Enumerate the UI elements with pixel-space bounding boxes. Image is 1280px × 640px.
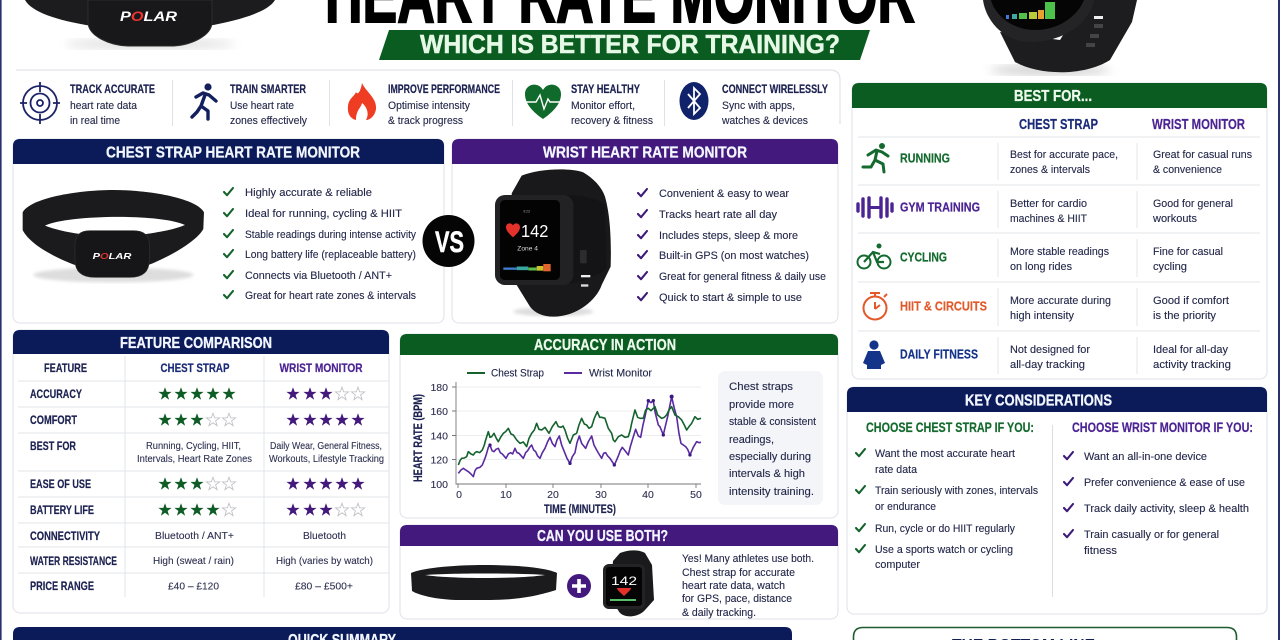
line chart: heart rate over time: 20 (547, 489, 559, 501)
text: connect wirelessly (721, 82, 828, 127)
image: wrist watch: 9:23 (523, 209, 530, 213)
callout: chest strap stability: provide more (729, 399, 794, 411)
row labels (30, 387, 117, 593)
table text cells: Intervals, Heart Rate Zones (137, 453, 252, 465)
icon: bluetooth (680, 82, 708, 120)
row labels: EASE OF USE (30, 477, 91, 491)
line chart: heart rate over time: 100 (430, 479, 448, 491)
row: running: Best for accurate pace, (1010, 149, 1118, 161)
column: choose wrist monitor (1064, 419, 1253, 557)
column: choose chest strap: Train seriously with zones, intervals (875, 485, 1038, 497)
row: daily fitness (863, 340, 1231, 371)
device image: sports watch top right (983, 0, 1137, 75)
text: track accurate: in real time (70, 115, 120, 127)
device image: polar strap top left: POLAR (120, 9, 177, 24)
text: use both: & daily tracking. (682, 607, 756, 619)
device image: polar strap top left (25, 0, 275, 49)
list: wrist benefits: Great for general fitness & daily use (659, 271, 826, 283)
row: cycling: cycling (1153, 261, 1187, 273)
table text cells: Bluetooth / ANT+ (155, 530, 234, 542)
line chart: heart rate over time: 180 (430, 382, 448, 394)
table text cells: £40 – £120 (168, 580, 219, 592)
text: track accurate: heart rate data (70, 100, 138, 112)
callout: chest strap stability: especially during (729, 451, 811, 463)
row: hiit and circuits: is the priority (1153, 310, 1216, 322)
row: hiit and circuits: high intensity (1010, 310, 1074, 322)
text: track accurate: TRACK ACCURATE (70, 82, 155, 96)
column: choose chest strap: Want the most accurate heart (875, 448, 1015, 460)
row: running: Great for casual runs (1153, 149, 1252, 161)
text: stay healthy: recovery & fitness (571, 115, 653, 127)
list: wrist benefits: Tracks heart rate all day (659, 209, 777, 221)
column headings (1019, 117, 1245, 133)
row: gym training (858, 198, 1233, 225)
line chart: heart rate over time: 30 (595, 489, 607, 501)
column: choose wrist monitor: Train casually or for general (1084, 529, 1219, 541)
row labels: PRICE RANGE (30, 579, 94, 593)
image: wrist watch (495, 169, 611, 317)
row: cycling: Fine for casual (1153, 246, 1223, 258)
chest strap star ratings (158, 387, 236, 516)
image: watch small: 142 (611, 576, 637, 588)
text: improve performance: & track progress (388, 115, 463, 127)
table text cells: Bluetooth (303, 530, 346, 542)
row: gym training: Better for cardio (1010, 198, 1087, 210)
row: cycling: More stable readings (1010, 246, 1109, 258)
chart legend: Wrist Monitor (589, 368, 652, 380)
column: choose chest strap: computer (875, 559, 920, 571)
text: improve performance: IMPROVE PERFORMANCE (388, 82, 500, 96)
text: use both: heart rate data, watch (682, 580, 785, 592)
text: train smarter (230, 82, 307, 127)
icon: flame (348, 83, 376, 120)
panel: wrist monitor (452, 139, 838, 323)
panel: key considerations (847, 387, 1267, 614)
list: wrist benefits: Convenient & easy to wear (659, 188, 789, 200)
list: wrist benefits (638, 188, 826, 304)
VS badge (422, 215, 474, 267)
text: connect wirelessly: CONNECT WIRELESSLY (722, 82, 828, 96)
row: daily fitness: Ideal for all-day (1153, 344, 1228, 356)
row: cycling: on long rides (1010, 261, 1072, 273)
table text cells: Running, Cycling, HIIT, (146, 440, 241, 452)
table text cells: Daily Wear, General Fitness, (270, 440, 382, 452)
table header row: CHEST STRAP (160, 361, 230, 375)
column: choose wrist monitor: fitness (1084, 545, 1118, 557)
list: wrist benefits: Quick to start & simple to use (659, 292, 802, 304)
text: stay healthy: STAY HEALTHY (571, 82, 640, 96)
row: gym training: machines & HIIT (1010, 213, 1087, 225)
heading: best for (852, 83, 1267, 108)
list: wrist benefits: Built-in GPS (on most watches) (659, 250, 809, 262)
row: daily fitness: activity tracking (1153, 359, 1231, 371)
column: choose chest strap: rate data (875, 464, 918, 476)
panel: accuracy in action (400, 334, 838, 518)
row: cycling: CYCLING (900, 250, 947, 264)
row: hiit and circuits: More accurate during (1010, 295, 1111, 307)
icon: runner (192, 83, 216, 119)
text: train smarter: Use heart rate (230, 100, 294, 112)
row: running: RUNNING (900, 152, 950, 166)
row: hiit and circuits: HIIT & CIRCUITS (900, 300, 987, 314)
subtitle banner: WHICH IS BETTER FOR TRAINING? (420, 29, 840, 59)
list: chest strap benefits: Ideal for running, cycling & HIIT (245, 208, 402, 220)
text: connect wirelessly: watches & devices (721, 115, 808, 127)
line chart: heart rate over time (411, 382, 702, 516)
line chart: heart rate over time: TIME (MINUTES) (544, 502, 616, 516)
row: daily fitness: Not designed for (1010, 344, 1090, 356)
column: choose chest strap: or endurance (875, 501, 936, 513)
row: gym training: GYM TRAINING (900, 200, 980, 214)
panel: can you use both (400, 525, 838, 619)
heading: can you use both: CAN YOU USE BOTH? (537, 528, 668, 545)
column: choose chest strap: CHOOSE CHEST STRAP IF YOU: (866, 419, 1034, 435)
line chart: heart rate over time: 10 (500, 489, 512, 501)
image: wrist watch: Zone 4 (517, 247, 539, 253)
column: choose chest strap (856, 419, 1038, 571)
list: chest strap benefits: Highly accurate & reliable (245, 187, 372, 199)
line chart: heart rate over time: HEART RATE (BPM) (411, 394, 425, 482)
image: chest strap: POLAR (93, 251, 131, 261)
heading: wrist monitor: WRIST HEART RATE MONITOR (543, 144, 747, 162)
table header row: FEATURE (44, 361, 87, 375)
text: use both: Yes! Many athletes use both. (682, 553, 814, 565)
line chart: heart rate over time: 120 (430, 454, 448, 466)
line chart: heart rate over time: 140 (430, 430, 448, 442)
row: running: zones & intervals (1010, 164, 1090, 176)
list: chest strap benefits (224, 187, 416, 302)
panel: the bottom line (854, 628, 1236, 640)
heading: accuracy in action (400, 334, 838, 355)
list: chest strap benefits: Stable readings during intense activity (245, 229, 416, 241)
row: hiit and circuits: Good if comfort (1153, 295, 1229, 307)
row: daily fitness: DAILY FITNESS (900, 348, 978, 362)
text: use both: Chest strap for accurate (682, 567, 795, 579)
heading: key considerations (847, 387, 1267, 412)
row: running (863, 143, 1252, 176)
row labels: COMFORT (30, 413, 78, 427)
text: train smarter: TRAIN SMARTER (230, 82, 306, 96)
table header row: WRIST MONITOR (280, 361, 363, 375)
row: gym training: Good for general (1153, 198, 1233, 210)
text: train smarter: zones effectively (230, 115, 307, 127)
row labels: ACCURACY (30, 387, 82, 401)
panel: chest strap (13, 139, 444, 323)
table text cells: £80 – £500+ (295, 580, 353, 592)
image: watch small (603, 550, 654, 616)
heading: chest strap (13, 139, 444, 164)
chart legend (467, 368, 652, 380)
text: connect wirelessly: Sync with apps, (722, 100, 795, 112)
line chart: heart rate over time: 160 (430, 406, 448, 418)
icon: plus (567, 574, 591, 598)
row: running: & convenience (1153, 164, 1222, 176)
panel: best for (852, 83, 1267, 379)
text: stay healthy (571, 82, 653, 127)
callout: chest strap stability: Chest straps (729, 381, 794, 393)
text: use both: for GPS, pace, distance (682, 593, 792, 605)
heading: feature comparison: FEATURE COMPARISON (120, 335, 272, 352)
column headings: WRIST MONITOR (1152, 117, 1245, 133)
panel: quick summary (13, 627, 792, 640)
text: improve performance (388, 82, 500, 127)
table header row (44, 361, 363, 375)
column: choose chest strap: Run, cycle or do HIIT regularly (875, 523, 1015, 535)
column: choose wrist monitor: Want an all-in-one device (1084, 451, 1207, 463)
heading: key considerations: KEY CONSIDERATIONS (965, 392, 1112, 410)
line chart: heart rate over time: 50 (690, 489, 702, 501)
image: wrist watch: 142 (521, 221, 548, 241)
list: chest strap benefits: Connects via Bluetooth / ANT+ (245, 270, 392, 282)
row labels: BEST FOR (30, 439, 76, 453)
callout: chest strap stability: stable & consistent (729, 416, 816, 428)
table text cells: Workouts, Lifestyle Tracking (269, 453, 384, 465)
icon: target (20, 82, 60, 124)
column: choose wrist monitor: Track daily activity, sleep & health (1084, 503, 1249, 515)
heading: chest strap: CHEST STRAP HEART RATE MONITOR (106, 144, 360, 162)
column: choose wrist monitor: Prefer convenience & ease of use (1084, 477, 1245, 489)
wrist monitor star ratings (286, 387, 365, 516)
heading: feature comparison (13, 330, 389, 354)
row: cycling (858, 244, 1223, 273)
row: daily fitness: all-day tracking (1010, 359, 1085, 371)
column: choose chest strap: Use a sports watch or cycling (875, 544, 1013, 556)
heading: accuracy in action: ACCURACY IN ACTION (534, 337, 676, 354)
list: wrist benefits: Includes steps, sleep & more (659, 230, 798, 242)
table text cells: High (sweat / rain) (153, 555, 234, 567)
row labels: BATTERY LIFE (30, 503, 94, 517)
row: gym training: workouts (1152, 213, 1197, 225)
callout: chest strap stability: intervals & high (729, 468, 805, 480)
text: improve performance: Optimise intensity (388, 100, 470, 112)
image: chest strap (23, 190, 204, 282)
list: chest strap benefits: Long battery life (replaceable battery) (245, 249, 416, 261)
row labels: CONNECTIVITY (30, 529, 100, 543)
feature strip (16, 70, 840, 127)
callout: chest strap stability: intensity training. (729, 486, 814, 498)
icon: heart (525, 85, 561, 119)
panel: feature comparison (13, 330, 389, 613)
text: use both (682, 553, 814, 619)
callout: chest strap stability (718, 371, 823, 505)
VS badge: VS (435, 226, 464, 259)
row: hiit and circuits (864, 293, 1229, 322)
line chart: heart rate over time: 40 (642, 489, 654, 501)
callout: chest strap stability: readings, (729, 434, 774, 446)
text: track accurate (70, 82, 155, 127)
table text cells: High (varies by watch) (276, 555, 373, 567)
heading: wrist monitor (452, 139, 838, 164)
heading: best for: BEST FOR... (1014, 88, 1092, 105)
row labels: WATER RESISTANCE (30, 554, 117, 568)
table text cells (137, 440, 384, 592)
column headings: CHEST STRAP (1019, 117, 1098, 133)
chart legend: Chest Strap (491, 368, 544, 380)
text: stay healthy: Monitor effort, (571, 100, 635, 112)
line chart: heart rate over time: 0 (456, 489, 462, 501)
heading: can you use both (400, 525, 838, 546)
image: chest strap small (411, 565, 557, 600)
list: chest strap benefits: Great for heart rate zones & intervals (245, 290, 416, 302)
